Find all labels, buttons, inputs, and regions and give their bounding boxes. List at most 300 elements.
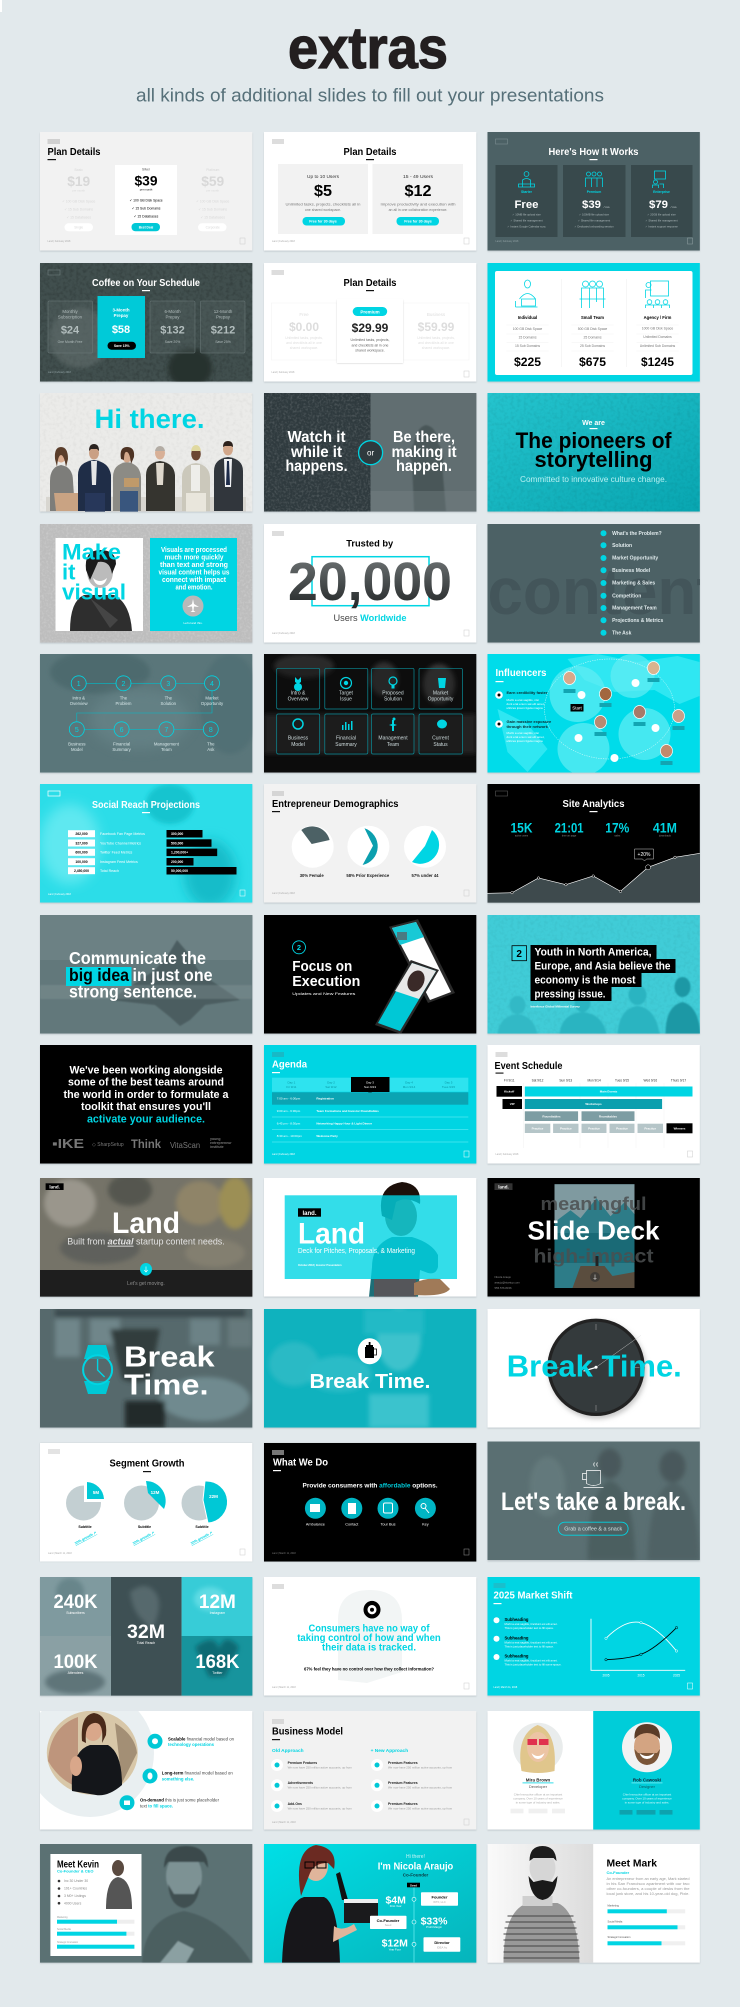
agenda list: Projections & Metrics bbox=[612, 618, 663, 624]
column: individual: Individual bbox=[518, 315, 537, 320]
skill bars: Strategic Innovation bbox=[57, 1941, 79, 1944]
tile labels: Summary bbox=[335, 742, 357, 748]
stats row: downloads bbox=[659, 835, 672, 838]
heading: Entrepreneur Demographics bbox=[272, 799, 399, 810]
panel: what we do bbox=[264, 1443, 476, 1562]
step numbers and labels one: Solution bbox=[161, 701, 177, 706]
source note: Interforce Global Millennial Survey bbox=[530, 1005, 580, 1009]
agenda list: Solution bbox=[612, 543, 632, 549]
column: premium: ✓ Shared file management bbox=[578, 219, 610, 223]
panel: here's how it works bbox=[488, 132, 700, 251]
panel: plan details, three tiers bbox=[40, 132, 252, 251]
option: 12-month: 12-Month bbox=[214, 309, 233, 314]
icon: ambulance: Ambulance bbox=[306, 1522, 325, 1526]
tier: business bbox=[417, 303, 469, 360]
panel: trusted by 20,000 bbox=[264, 524, 476, 643]
column: individual: 15 Domains bbox=[518, 336, 537, 340]
stat: 12M: 12M bbox=[199, 1592, 236, 1613]
step row two bbox=[69, 722, 218, 737]
heading: make it visual: it bbox=[62, 560, 76, 585]
heading: What We Do bbox=[273, 1458, 328, 1469]
statement: activate your audience. bbox=[87, 1113, 205, 1125]
panel: activate your audience bbox=[40, 1045, 252, 1164]
option: 6-month bbox=[150, 301, 195, 353]
column: small team: $675 bbox=[579, 355, 606, 369]
tier: premium bbox=[337, 299, 403, 364]
text block: much more quickly bbox=[164, 555, 224, 562]
bullet: credibility: ultrices ipsum ligula magna bbox=[506, 706, 543, 710]
photo: six seated people bbox=[46, 441, 246, 512]
panel: coffee on your schedule bbox=[40, 263, 252, 388]
option: monthly bbox=[48, 301, 92, 353]
stat: 32M: 32M bbox=[127, 1622, 165, 1643]
card: director: Director bbox=[434, 1940, 450, 1945]
agenda rows: 6:45 pm - 8:30pm bbox=[277, 1121, 301, 1125]
badge: or bbox=[359, 441, 383, 465]
profile: mira brown: in some type of industry and sales. bbox=[516, 1801, 560, 1805]
facts list bbox=[58, 1879, 88, 1905]
text block: connect with impact bbox=[162, 577, 227, 584]
old approach list: Advertisements bbox=[288, 1781, 313, 1785]
day tabs: Fri 9/11 bbox=[286, 1085, 297, 1089]
line chart: 2005 bbox=[602, 1673, 610, 1677]
biography: in his San Francisco apartment with our two bbox=[606, 1882, 690, 1886]
agenda list: Management Team bbox=[612, 606, 657, 612]
schedule blocks: VIP bbox=[510, 1102, 515, 1106]
watermark: content bbox=[488, 554, 718, 628]
tile labels: Opportunity bbox=[428, 696, 454, 702]
tier: basic: ✓ 15 Sub Domains bbox=[64, 208, 93, 212]
column: individual: $225 bbox=[514, 355, 541, 369]
tier: platinum bbox=[196, 168, 229, 231]
icon: ambulance bbox=[305, 1498, 326, 1526]
statement: taking control of how and when bbox=[297, 1632, 441, 1644]
agenda rows: 7:00 am - 6:00pm bbox=[277, 1096, 301, 1100]
profile: mira brown bbox=[510, 1723, 565, 1813]
tile labels: Target bbox=[339, 690, 354, 696]
badge: 2: 2 bbox=[516, 949, 522, 960]
icon: contact bbox=[341, 1498, 362, 1526]
card: founder bbox=[385, 1892, 458, 1908]
option: 12-month: Prepay bbox=[216, 314, 231, 320]
tier: platinum: ✓ 100 GB Disk Space bbox=[196, 199, 229, 203]
tag: land. bbox=[498, 1184, 509, 1189]
bullet: on-demand bbox=[120, 1795, 220, 1810]
panel: meet mark bbox=[488, 1844, 700, 1963]
icon: tour bus: Tour Bus bbox=[381, 1522, 396, 1526]
panel: content list bbox=[488, 524, 718, 643]
step row one bbox=[71, 676, 220, 691]
statement bbox=[64, 1065, 229, 1125]
tile labels: Business bbox=[288, 736, 309, 742]
area chart bbox=[488, 853, 700, 903]
tile labels: Team bbox=[387, 742, 399, 748]
step numbers and labels one: 2 bbox=[122, 681, 126, 688]
icon: agency bbox=[646, 281, 670, 308]
step numbers and labels one: 1 bbox=[77, 681, 81, 688]
heading: Meet Mark bbox=[606, 1859, 657, 1870]
tier: 15-49 users: 15 - 49 Users bbox=[403, 174, 434, 179]
heading: Here's How It Works bbox=[548, 147, 639, 158]
panel: make it visual bbox=[40, 524, 252, 643]
panel: slide deck bbox=[488, 1178, 700, 1297]
schedule blocks: Practice bbox=[616, 1126, 628, 1130]
panel: let's take a break bbox=[488, 1442, 700, 1560]
heading: Social Reach Projections bbox=[92, 800, 200, 811]
tier: platinum: $59 bbox=[201, 173, 224, 189]
callout: +20% bbox=[634, 849, 654, 861]
step numbers and labels one: 3 bbox=[166, 681, 170, 688]
card: founder: First Year bbox=[390, 1904, 402, 1908]
tier: 15-49 users: an all in one collaboration experience. bbox=[389, 208, 447, 212]
heading: Time. bbox=[124, 1370, 208, 1402]
option: 12-month: Save 25% bbox=[215, 340, 231, 344]
tile icons bbox=[293, 677, 447, 731]
heading: Execution bbox=[292, 973, 360, 990]
column: starter: Free bbox=[514, 199, 538, 211]
tier: silver: ✓ 15 Sub Domains bbox=[132, 206, 161, 210]
tile labels: Overview bbox=[288, 696, 309, 702]
connectors bbox=[77, 683, 212, 729]
tier: up to 10 users: Up to 10 Users bbox=[307, 174, 340, 179]
column heads: Old Approach bbox=[272, 1748, 304, 1754]
statement: watch it bbox=[286, 429, 348, 475]
column: enterprise: $79 bbox=[649, 199, 668, 211]
bullet: exposure: Gain massive exposure bbox=[506, 719, 552, 724]
panel: consumers statement bbox=[264, 1577, 476, 1696]
pie: 12M: Subtitle bbox=[138, 1525, 151, 1529]
heading: storytelling bbox=[534, 447, 652, 472]
column: premium: Premium bbox=[587, 190, 601, 194]
column: starter bbox=[496, 165, 558, 237]
panel: 2025 market shift bbox=[488, 1577, 700, 1696]
tag bbox=[494, 1183, 512, 1190]
statement: be there: Be there, bbox=[393, 429, 455, 446]
tier: silver bbox=[115, 165, 177, 235]
day header: Tues 9/15 bbox=[615, 1079, 629, 1083]
schedule blocks: Practice bbox=[644, 1126, 656, 1130]
panel: agenda: Land | February 2018 bbox=[272, 1153, 295, 1156]
stats row: sales bbox=[614, 835, 621, 838]
schedule blocks: Practice bbox=[560, 1126, 572, 1130]
tier: platinum: ✓ 15 Sub Domains bbox=[198, 208, 227, 212]
old approach list: Add-Ons bbox=[288, 1802, 302, 1806]
column: starter: ✓ 10MB file upload size bbox=[512, 213, 541, 217]
step numbers and labels two: Team bbox=[161, 747, 172, 752]
step numbers and labels two: Business bbox=[68, 742, 86, 747]
icon: coffee cup bbox=[582, 1462, 604, 1488]
panel: coffee on your schedule: Land | February 2018 bbox=[48, 371, 71, 374]
card: director: Year Four bbox=[389, 1948, 401, 1952]
badge: or: or bbox=[367, 448, 374, 458]
line chart bbox=[591, 1619, 685, 1677]
column: enterprise: ✓ Instant support response bbox=[645, 225, 678, 229]
statement: watch it: happens. bbox=[286, 458, 348, 475]
column: enterprise: / mo bbox=[671, 205, 677, 209]
tier: silver: $39 bbox=[134, 172, 158, 188]
skill bars: Strategic Innovation bbox=[608, 1935, 631, 1939]
skill bars: Marketing bbox=[57, 1916, 68, 1919]
column: small team: Small Team bbox=[581, 315, 604, 320]
tile labels: Solution bbox=[384, 696, 402, 702]
icon: french press bbox=[358, 1338, 382, 1364]
panel: 2025 market shift: Land | March 11, 2018 bbox=[494, 1686, 518, 1689]
tile labels: Financial bbox=[336, 736, 356, 742]
icon: key bbox=[415, 1498, 436, 1526]
panel: meet kevin: Co-Founder & CEO bbox=[57, 1869, 93, 1874]
network circles bbox=[550, 654, 670, 775]
client logos: entrepreneur bbox=[210, 1141, 232, 1145]
overlay box bbox=[285, 1195, 457, 1279]
card: co-founder bbox=[370, 1915, 448, 1929]
skill bars bbox=[608, 1904, 685, 1945]
bullet: scalable bbox=[148, 1734, 235, 1749]
pie: 57% under 44 bbox=[404, 826, 446, 878]
highlighted statement bbox=[530, 945, 676, 1001]
card: director: $12M bbox=[382, 1938, 408, 1950]
tier: platinum: Corporate bbox=[206, 226, 220, 230]
statement: big idea bbox=[69, 965, 129, 985]
profile: mira brown: company. Over 10 years of experience bbox=[513, 1797, 563, 1801]
stat: 100K: 100K bbox=[54, 1652, 98, 1673]
option: 6-month: $132 bbox=[160, 325, 185, 337]
line chart: 2025 bbox=[673, 1673, 680, 1677]
tier: business: $59.99 bbox=[418, 320, 455, 334]
tier: business: Unlimited tasks, projects, bbox=[417, 336, 455, 340]
agenda list: The Ask bbox=[612, 630, 632, 636]
panel: meet mark: Co-Founder bbox=[606, 1870, 630, 1875]
text block: and emotion. bbox=[176, 584, 213, 591]
tier: free: shared workspace. bbox=[290, 346, 318, 350]
statement bbox=[69, 948, 213, 1001]
heading: Site Analytics bbox=[562, 799, 625, 810]
statement: be there bbox=[392, 429, 457, 475]
column: agency bbox=[640, 316, 675, 367]
biography: other co-founders, a couple of desks from the bbox=[606, 1887, 690, 1891]
agenda list: What's the Problem? bbox=[612, 531, 662, 537]
agenda rows: Networking Happy Hour & Light Dinner bbox=[316, 1121, 373, 1125]
column heads bbox=[272, 1748, 408, 1754]
facts list: Inc 30 Under 30 bbox=[64, 1879, 88, 1883]
text: we are: We are bbox=[582, 420, 605, 427]
icon: contact: Contact bbox=[345, 1522, 359, 1526]
bullet: on-demand: text to fill space. bbox=[140, 1803, 173, 1808]
bullet: exposure: ultrices ipsum ligula magna bbox=[506, 739, 543, 743]
panel: agenda bbox=[264, 1045, 476, 1164]
icon: down arrow bbox=[140, 1263, 152, 1276]
bullet list: Subheading bbox=[504, 1635, 529, 1640]
photo: small portrait bbox=[106, 1860, 132, 1909]
day tabs: Day 4 bbox=[405, 1080, 413, 1084]
day header: Mon 9/14 bbox=[587, 1079, 601, 1083]
tier: up to 10 users: Unlimited tasks, projects, checklists all in bbox=[286, 203, 361, 207]
photo: laughing man bbox=[70, 550, 132, 631]
pie: 5M: 10% growth ↗ bbox=[74, 1531, 97, 1546]
subheading: Committed to innovative culture change. bbox=[520, 474, 667, 484]
pie: 12M: 10% growth ↗ bbox=[132, 1531, 155, 1546]
column: agency: 1000 GB Disk Space bbox=[642, 326, 673, 330]
heading: The pioneers of bbox=[516, 428, 672, 453]
icon: watch bbox=[83, 1345, 112, 1394]
decorative arch bbox=[338, 1590, 402, 1683]
tier: basic bbox=[62, 168, 95, 231]
tiles outline bbox=[277, 668, 462, 754]
panel: land deck with man bbox=[264, 1178, 476, 1297]
step numbers and labels two: 7 bbox=[164, 727, 168, 734]
option: 3-month highlighted: 3-Month bbox=[112, 308, 130, 312]
biography: local junk store, and his 10-year-old dog, Pixie. bbox=[606, 1892, 690, 1896]
heading: Land bbox=[112, 1207, 180, 1240]
day header: Fri 9/11 bbox=[504, 1079, 515, 1083]
tier: basic: Single bbox=[74, 226, 83, 230]
highlight: big idea bbox=[66, 967, 132, 986]
agenda list: Business Model bbox=[612, 568, 651, 574]
tier: up to 10 users: one shared workspace. bbox=[305, 208, 341, 212]
tier: free: $0.00 bbox=[289, 320, 319, 334]
client logos: institute bbox=[210, 1145, 224, 1149]
panel: social reach projections bbox=[40, 784, 252, 908]
column: small team: 25 Sub Domains bbox=[580, 344, 605, 348]
day header: Wed 9/16 bbox=[644, 1079, 657, 1083]
column: small team: 25 Domains bbox=[583, 336, 602, 340]
bar chart: projections: 1,200,000+ bbox=[171, 851, 188, 855]
tier: free: Unlimited tasks, projects, bbox=[285, 336, 323, 340]
agenda list: Market Opportunity bbox=[612, 556, 658, 562]
photo: woman with clapper bbox=[282, 1845, 378, 1963]
skill bars bbox=[57, 1916, 134, 1949]
statement: their data is tracked. bbox=[322, 1641, 416, 1653]
profile: rob cawoski: Designer bbox=[639, 1784, 656, 1789]
skill bars: Marketing bbox=[608, 1904, 619, 1908]
statement: be there: making it bbox=[392, 444, 457, 461]
day tabs: Sat 9/12 bbox=[325, 1085, 337, 1089]
profile: mira brown: Developer bbox=[529, 1784, 548, 1789]
column: small team: 500 GB Disk Space bbox=[578, 327, 607, 331]
day tabs: Sun 9/13 bbox=[364, 1085, 376, 1089]
tier: basic: ✓ 100 GB Disk Space bbox=[62, 199, 95, 203]
panel: consumers statement: Land | March 11, 2018 bbox=[272, 1686, 296, 1689]
heading: make it visual bbox=[62, 540, 126, 605]
step numbers and labels two: 5 bbox=[75, 727, 79, 734]
panel: pioneers of storytelling bbox=[488, 393, 700, 512]
callout: +20%: +20% bbox=[638, 852, 651, 858]
heading: Coffee on Your Schedule bbox=[92, 278, 200, 289]
kinetic text: Slide Deck bbox=[528, 1215, 660, 1245]
highlighted statement: pressing issue. bbox=[534, 988, 606, 1000]
bullet: exposure bbox=[495, 719, 552, 743]
column: individual: 100 GB Disk Space bbox=[513, 327, 542, 331]
step numbers and labels one: Intro & bbox=[72, 696, 85, 701]
statement: be there: happen. bbox=[396, 458, 452, 475]
text block: than text and strong bbox=[160, 562, 228, 569]
option: monthly: Monthly bbox=[62, 309, 78, 314]
greeting: Co-Founder bbox=[403, 1873, 428, 1878]
heading: Agenda bbox=[272, 1059, 307, 1070]
heading bbox=[124, 1341, 216, 1402]
statement: watch it: while it bbox=[290, 444, 343, 461]
schedule blocks: Main Events bbox=[600, 1090, 618, 1094]
column: enterprise: Enterprise bbox=[653, 190, 670, 194]
heading: Event Schedule bbox=[494, 1061, 563, 1072]
greeting: I'm Nicola Araujo bbox=[378, 1860, 453, 1872]
pie: 5M: 5M bbox=[93, 1490, 99, 1495]
card: founder: $4M bbox=[385, 1894, 406, 1906]
client logos: VitaScan bbox=[170, 1141, 200, 1150]
tile labels: Market bbox=[433, 690, 449, 696]
icon: clock bbox=[547, 1319, 646, 1419]
heading: 2025 Market Shift bbox=[494, 1591, 573, 1602]
option: 3-month highlighted: Save 15% bbox=[114, 344, 130, 348]
bullet list: This is just placeholder text to fill space. bbox=[504, 1626, 554, 1630]
table: current values: 262,000 bbox=[75, 832, 88, 836]
option: 3-month highlighted: Prepay bbox=[114, 313, 129, 318]
client logos: ◇ SharpSetup bbox=[92, 1142, 124, 1148]
icon: plane bbox=[182, 596, 204, 616]
biography bbox=[606, 1877, 690, 1896]
step numbers and labels one: 4 bbox=[210, 681, 214, 688]
heading: Plan Details bbox=[344, 278, 397, 289]
bullet: credibility bbox=[495, 690, 548, 710]
tier: 15-49 users: Improve productivity and execution with bbox=[380, 203, 456, 207]
day tabs: Day 5 bbox=[445, 1080, 453, 1084]
panel: metric mosaic bbox=[40, 1577, 253, 1696]
pie: 12M bbox=[124, 1481, 166, 1546]
bullet: exposure: Morbi a erat sagittis, nisi bbox=[506, 731, 539, 735]
tile labels: Management bbox=[378, 736, 408, 742]
tier: up to 10 users: Free for 30 days bbox=[309, 220, 337, 224]
tier: platinum: Platinum bbox=[206, 168, 219, 172]
bullet: credibility: Morbi a erat sagittis, nisi bbox=[506, 698, 539, 702]
panel: plan details, two tiers bbox=[264, 132, 476, 251]
panel: segment growth bbox=[40, 1443, 252, 1562]
stats row: 21:01 bbox=[555, 820, 584, 835]
schedule blocks: Practice bbox=[532, 1126, 544, 1130]
schedule blocks: Roundtables bbox=[599, 1114, 617, 1118]
heading: Break bbox=[124, 1341, 216, 1373]
option: 6-month: Prepay bbox=[166, 314, 180, 320]
bar chart: projections: 50,000,000 bbox=[171, 869, 188, 873]
day tabs bbox=[272, 1077, 468, 1094]
bar chart: projections: 200,000 bbox=[171, 860, 183, 864]
heading: Break Time. bbox=[507, 1348, 682, 1383]
photo: smiling man bbox=[369, 1182, 450, 1297]
heading: plan details: Plan Details bbox=[48, 147, 101, 158]
panel: break time coffee bbox=[264, 1307, 476, 1428]
tier: basic: Basic bbox=[75, 168, 83, 172]
panel: entrepreneur demographics: Land | February 2018 bbox=[272, 892, 295, 895]
heading: Trusted by bbox=[346, 539, 394, 550]
tier: silver: per month bbox=[140, 188, 153, 192]
bullet: credibility: dunt erat enum sat elit amet, bbox=[506, 702, 545, 706]
profile: rob cawoski: Chief executive officer at an important bbox=[623, 1792, 671, 1796]
panel: influencers bbox=[488, 654, 700, 775]
panel: plan details, three tiers: Land | February 2018 bbox=[48, 240, 71, 243]
panel: watch it or be there bbox=[264, 393, 476, 512]
column: starter: ✓ Instant Google Calendar sync bbox=[507, 225, 546, 229]
stats row: 17% bbox=[605, 820, 629, 835]
frame bbox=[312, 557, 429, 606]
pie: 5M: Subtitle bbox=[78, 1525, 92, 1529]
pie: 22M bbox=[182, 1481, 228, 1546]
column: starter: ✓ Shared file management bbox=[510, 219, 543, 223]
card: co-founder: Profit Margin bbox=[426, 1925, 442, 1929]
contact lines: araujo@startup.com bbox=[494, 1281, 520, 1285]
photo: mountain reflection bbox=[110, 940, 240, 1026]
day tabs: Day 2 bbox=[327, 1080, 335, 1084]
stat: 240K: Subscribers bbox=[66, 1611, 85, 1615]
button bbox=[558, 1522, 628, 1535]
highlighted statement: Europe, and Asia believe the bbox=[534, 960, 670, 972]
